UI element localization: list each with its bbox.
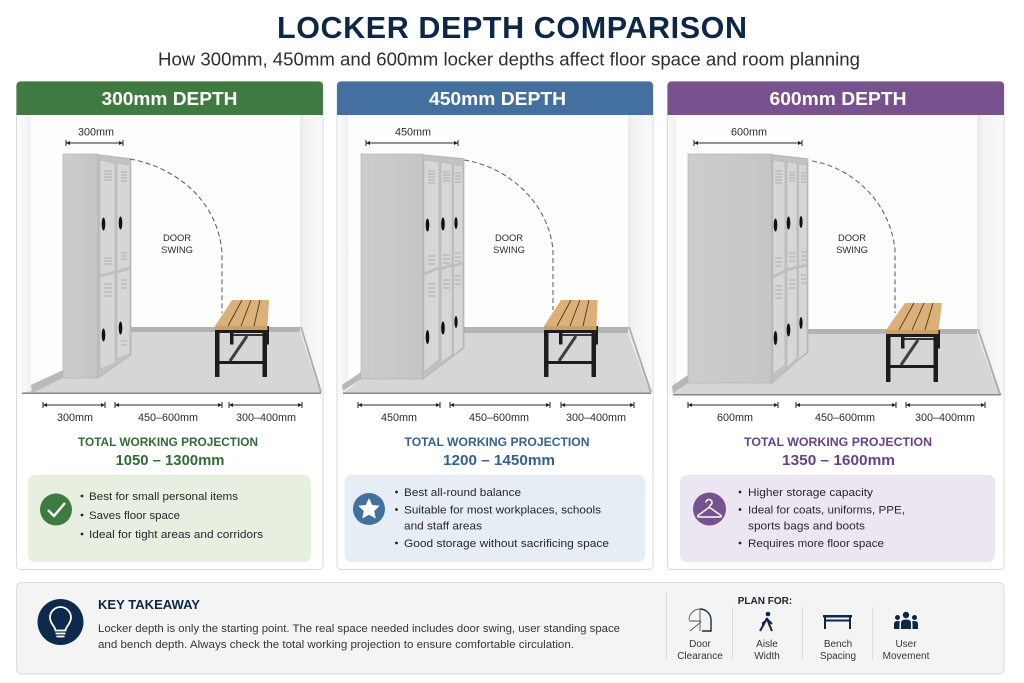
bottom dimensions: 450mm: 450–600mm — [469, 412, 529, 424]
total working projection: 300mm: TOTAL WORKING PROJECTION — [78, 435, 258, 449]
bottom dimensions: 300mm: 450–600mm — [138, 412, 198, 424]
bottom dimensions: 600mm: 600mm — [717, 412, 753, 424]
header: 450mm: 450mm DEPTH — [429, 89, 566, 109]
bullets: 450mm: and staff areas — [404, 520, 482, 532]
bullets: 450mm: Suitable for most workplaces, schools — [404, 504, 601, 516]
total working projection: 300mm: 1050 – 1300mm — [116, 452, 224, 469]
bullets: 450mm: Best all-round balance — [404, 487, 521, 499]
locker: 600mm — [688, 154, 808, 383]
room scene: 450mm — [338, 115, 652, 394]
door swing: 300mm: DOOR — [163, 232, 191, 243]
bullets: 300mm: Best for small personal items — [89, 491, 238, 503]
title: LOCKER DEPTH COMPARISON — [277, 11, 747, 45]
bottom dimensions: 600mm — [688, 405, 985, 424]
door swing: 600mm: SWING — [836, 244, 868, 255]
door swing: 450mm: SWING — [493, 244, 525, 255]
total working projection: 600mm: TOTAL WORKING PROJECTION — [744, 435, 932, 449]
takeaway body text — [98, 623, 620, 651]
depth dimension: 300mm: 300mm — [78, 126, 114, 138]
bench: 450mm — [544, 300, 598, 377]
item: user movement — [883, 612, 930, 662]
panel: 300mm depth — [16, 82, 323, 570]
header: 600mm: 600mm DEPTH — [770, 89, 906, 109]
notes box: 600mm — [680, 475, 995, 562]
bottom dimensions: 450mm — [358, 405, 634, 424]
notes box: 450mm — [344, 475, 645, 562]
icon: star — [353, 493, 385, 525]
bottom dimensions: 600mm: 300–400mm — [915, 412, 975, 424]
door swing: 600mm: DOOR — [838, 232, 866, 243]
takeaway body text: and bench depth. Always check the total working projection to ensure comfortable circulation. — [98, 639, 574, 651]
bullets: 300mm — [81, 491, 263, 541]
panel: 600mm depth — [668, 82, 1004, 570]
item: aisle width: Aisle — [756, 639, 778, 650]
header: 300mm — [16, 82, 323, 115]
depth dimension: 300mm — [66, 126, 123, 143]
panel: 450mm depth — [337, 82, 653, 570]
item: door clearance: Clearance — [677, 651, 723, 662]
bench: 300mm — [215, 300, 269, 377]
heading: key takeaway: KEY TAKEAWAY — [98, 598, 201, 612]
header: 300mm: 300mm DEPTH — [102, 89, 238, 109]
bullets: 600mm: Ideal for coats, uniforms, PPE, — [748, 504, 905, 516]
bullets: 600mm: sports bags and boots — [748, 520, 865, 532]
takeaway body text: Locker depth is only the starting point. The real space needed includes door swing, user standing space — [98, 623, 620, 635]
bottom dimensions: 450mm: 450mm — [381, 412, 417, 424]
item: bench spacing — [820, 615, 856, 662]
total working projection: 600mm: 1350 – 1600mm — [782, 452, 895, 469]
bullets: 600mm: Requires more floor space — [748, 538, 884, 550]
header: 450mm — [337, 82, 653, 115]
bullets: 300mm: Ideal for tight areas and corridors — [89, 529, 263, 541]
item: user movement: Movement — [883, 651, 930, 662]
item: bench spacing: Bench — [824, 639, 852, 650]
item: user movement: User — [895, 639, 917, 650]
item: aisle width: Width — [754, 651, 780, 662]
bottom dimensions: 300mm: 300–400mm — [236, 412, 296, 424]
panel: key takeaway — [16, 582, 1004, 674]
total working projection: 300mm — [78, 435, 258, 469]
total working projection: 600mm — [744, 435, 932, 469]
bullets: 300mm: Saves floor space — [89, 510, 180, 522]
icon: light bulb — [38, 599, 84, 645]
room scene: 300mm — [17, 115, 322, 394]
icon: check — [40, 494, 72, 526]
total working projection: 450mm: 1200 – 1450mm — [443, 452, 555, 469]
bottom dimensions: 300mm: 300mm — [57, 412, 93, 424]
locker: 300mm — [63, 154, 131, 378]
icon: hanger — [693, 492, 726, 526]
door swing: 300mm — [130, 159, 222, 313]
door swing: 450mm — [464, 160, 553, 310]
locker: 450mm — [361, 154, 464, 379]
subtitle: How 300mm, 450mm and 600mm locker depths affect floor space and room planning — [158, 50, 860, 70]
item: bench spacing: Spacing — [820, 651, 856, 662]
total working projection: 450mm — [404, 435, 590, 469]
bottom dimensions: 450mm: 300–400mm — [566, 412, 626, 424]
bottom dimensions: 300mm — [43, 405, 302, 424]
heading: plan for: PLAN FOR: — [738, 596, 792, 607]
bullets: 450mm: Good storage without sacrificing space — [404, 538, 609, 550]
depth dimension: 600mm — [694, 126, 802, 143]
door swing: 600mm — [812, 161, 895, 313]
bullets: 600mm: Higher storage capacity — [748, 487, 873, 499]
bench: 600mm — [886, 303, 942, 382]
item: aisle width — [754, 612, 780, 662]
door swing: 450mm: DOOR — [495, 232, 523, 243]
depth dimension: 450mm — [366, 126, 458, 143]
item: door clearance: Door — [689, 639, 712, 650]
bullets: 450mm — [395, 487, 609, 550]
depth dimension: 600mm: 600mm — [731, 126, 767, 138]
bottom dimensions: 600mm: 450–600mm — [815, 412, 875, 424]
header: 600mm — [668, 82, 1004, 115]
room scene: 600mm — [668, 115, 1003, 396]
door swing: 300mm: SWING — [161, 244, 193, 255]
depth dimension: 450mm: 450mm — [395, 126, 431, 138]
item: door clearance — [677, 609, 723, 662]
bullets: 600mm — [739, 487, 905, 550]
total working projection: 450mm: TOTAL WORKING PROJECTION — [404, 435, 590, 449]
notes box: 300mm — [28, 475, 311, 562]
